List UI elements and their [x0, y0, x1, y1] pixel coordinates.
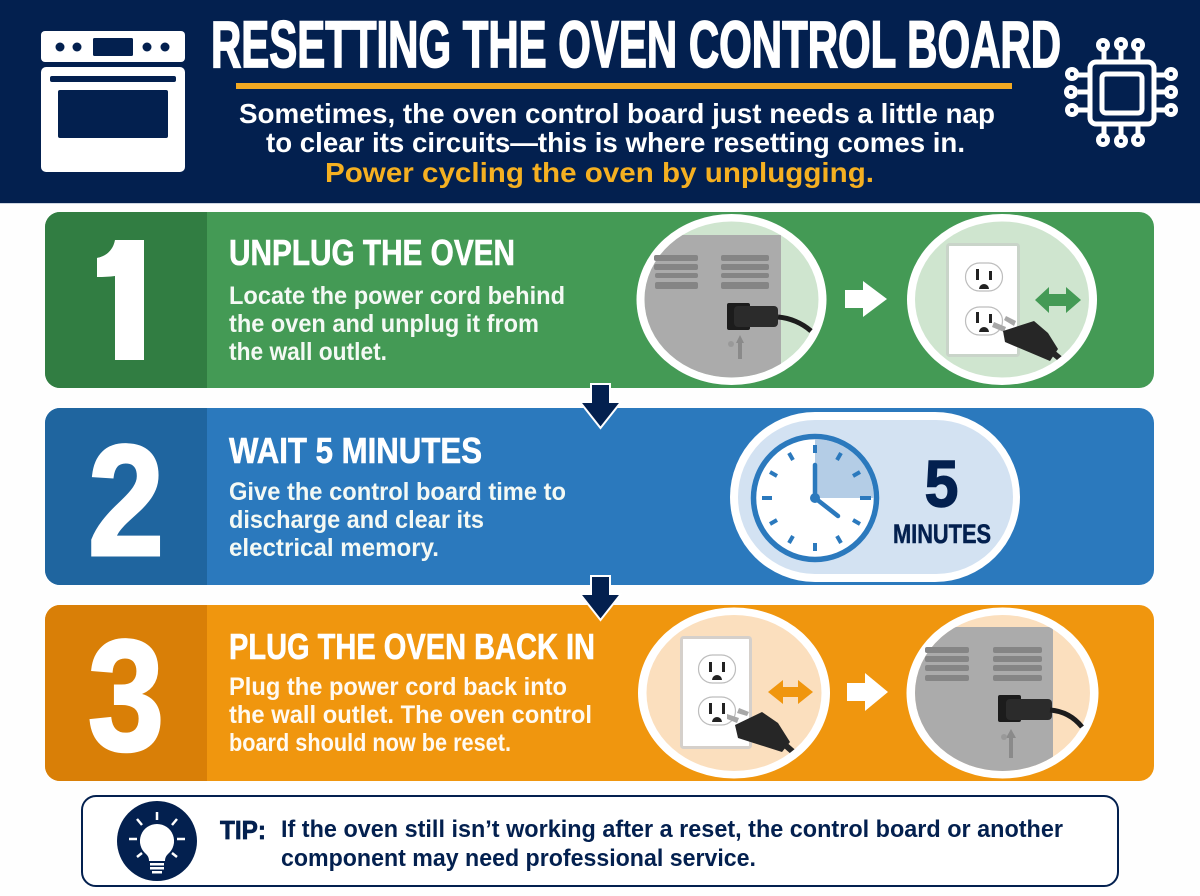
panel: step 1 unplug: [45, 207, 1154, 397]
step 3 description: [229, 673, 592, 757]
intro text: [239, 98, 995, 188]
icon: circuit chip: [1066, 40, 1176, 146]
panel: step 3 plug in: [45, 605, 1154, 784]
step 1 description: the oven and unplug it from: [229, 310, 539, 338]
step 1 description: Locate the power cord behind: [229, 282, 565, 310]
step 3 description: the wall outlet. The oven control: [229, 701, 592, 729]
icon: light bulb: [117, 801, 197, 881]
step 2 description: [229, 478, 566, 562]
step 2 heading: WAIT 5 MINUTES: [229, 430, 482, 471]
intro text: Power cycling the oven by unplugging.: [325, 157, 874, 188]
step 3 description: board should now be reset.: [229, 729, 511, 757]
tip text: [281, 816, 1063, 872]
panel: tip: [82, 796, 1118, 886]
step 1 description: the wall outlet.: [229, 338, 387, 366]
arrow: next: [845, 281, 887, 317]
illustration: cord plugged into oven back: [636, 214, 826, 385]
step 2 description: electrical memory.: [229, 534, 439, 562]
intro text: to clear its circuits—this is where resetting comes in.: [266, 127, 965, 158]
icon: oven: [41, 31, 185, 172]
tip text: component may need professional service.: [281, 845, 756, 872]
header banner: [0, 0, 1200, 204]
arrow: step 1 to step 2: [580, 384, 621, 428]
step 3 description: Plug the power cord back into: [229, 673, 567, 701]
illustration: unplugging from wall outlet: [907, 214, 1097, 385]
tip label: TIP:: [220, 815, 266, 845]
step 3 heading: PLUG THE OVEN BACK IN: [229, 626, 595, 667]
icon: clock: [754, 436, 876, 560]
arrow: step 2 to step 3: [580, 576, 621, 620]
timer number: 5: [925, 448, 958, 521]
step number 2: 2: [88, 413, 164, 589]
step number 1: 1: [79, 207, 173, 397]
step 1 heading: UNPLUG THE OVEN: [229, 232, 515, 273]
arrow: next: [847, 673, 888, 711]
callout: 5 minute timer: [730, 412, 1020, 582]
step 2 description: discharge and clear its: [229, 506, 484, 534]
panel: step 2 wait: [45, 408, 1154, 589]
intro text: Sometimes, the oven control board just needs a little nap: [239, 98, 995, 129]
tip text: If the oven still isn’t working after a reset, the control board or another: [281, 816, 1063, 843]
illustration: plugging into wall outlet: [638, 608, 830, 778]
timer unit: MINUTES: [893, 519, 991, 549]
title underline: [236, 83, 1012, 89]
step number 3: 3: [88, 608, 164, 784]
step 1 description: [229, 282, 565, 366]
illustration: cord plugged back into oven: [906, 608, 1098, 778]
step 2 description: Give the control board time to: [229, 478, 566, 506]
